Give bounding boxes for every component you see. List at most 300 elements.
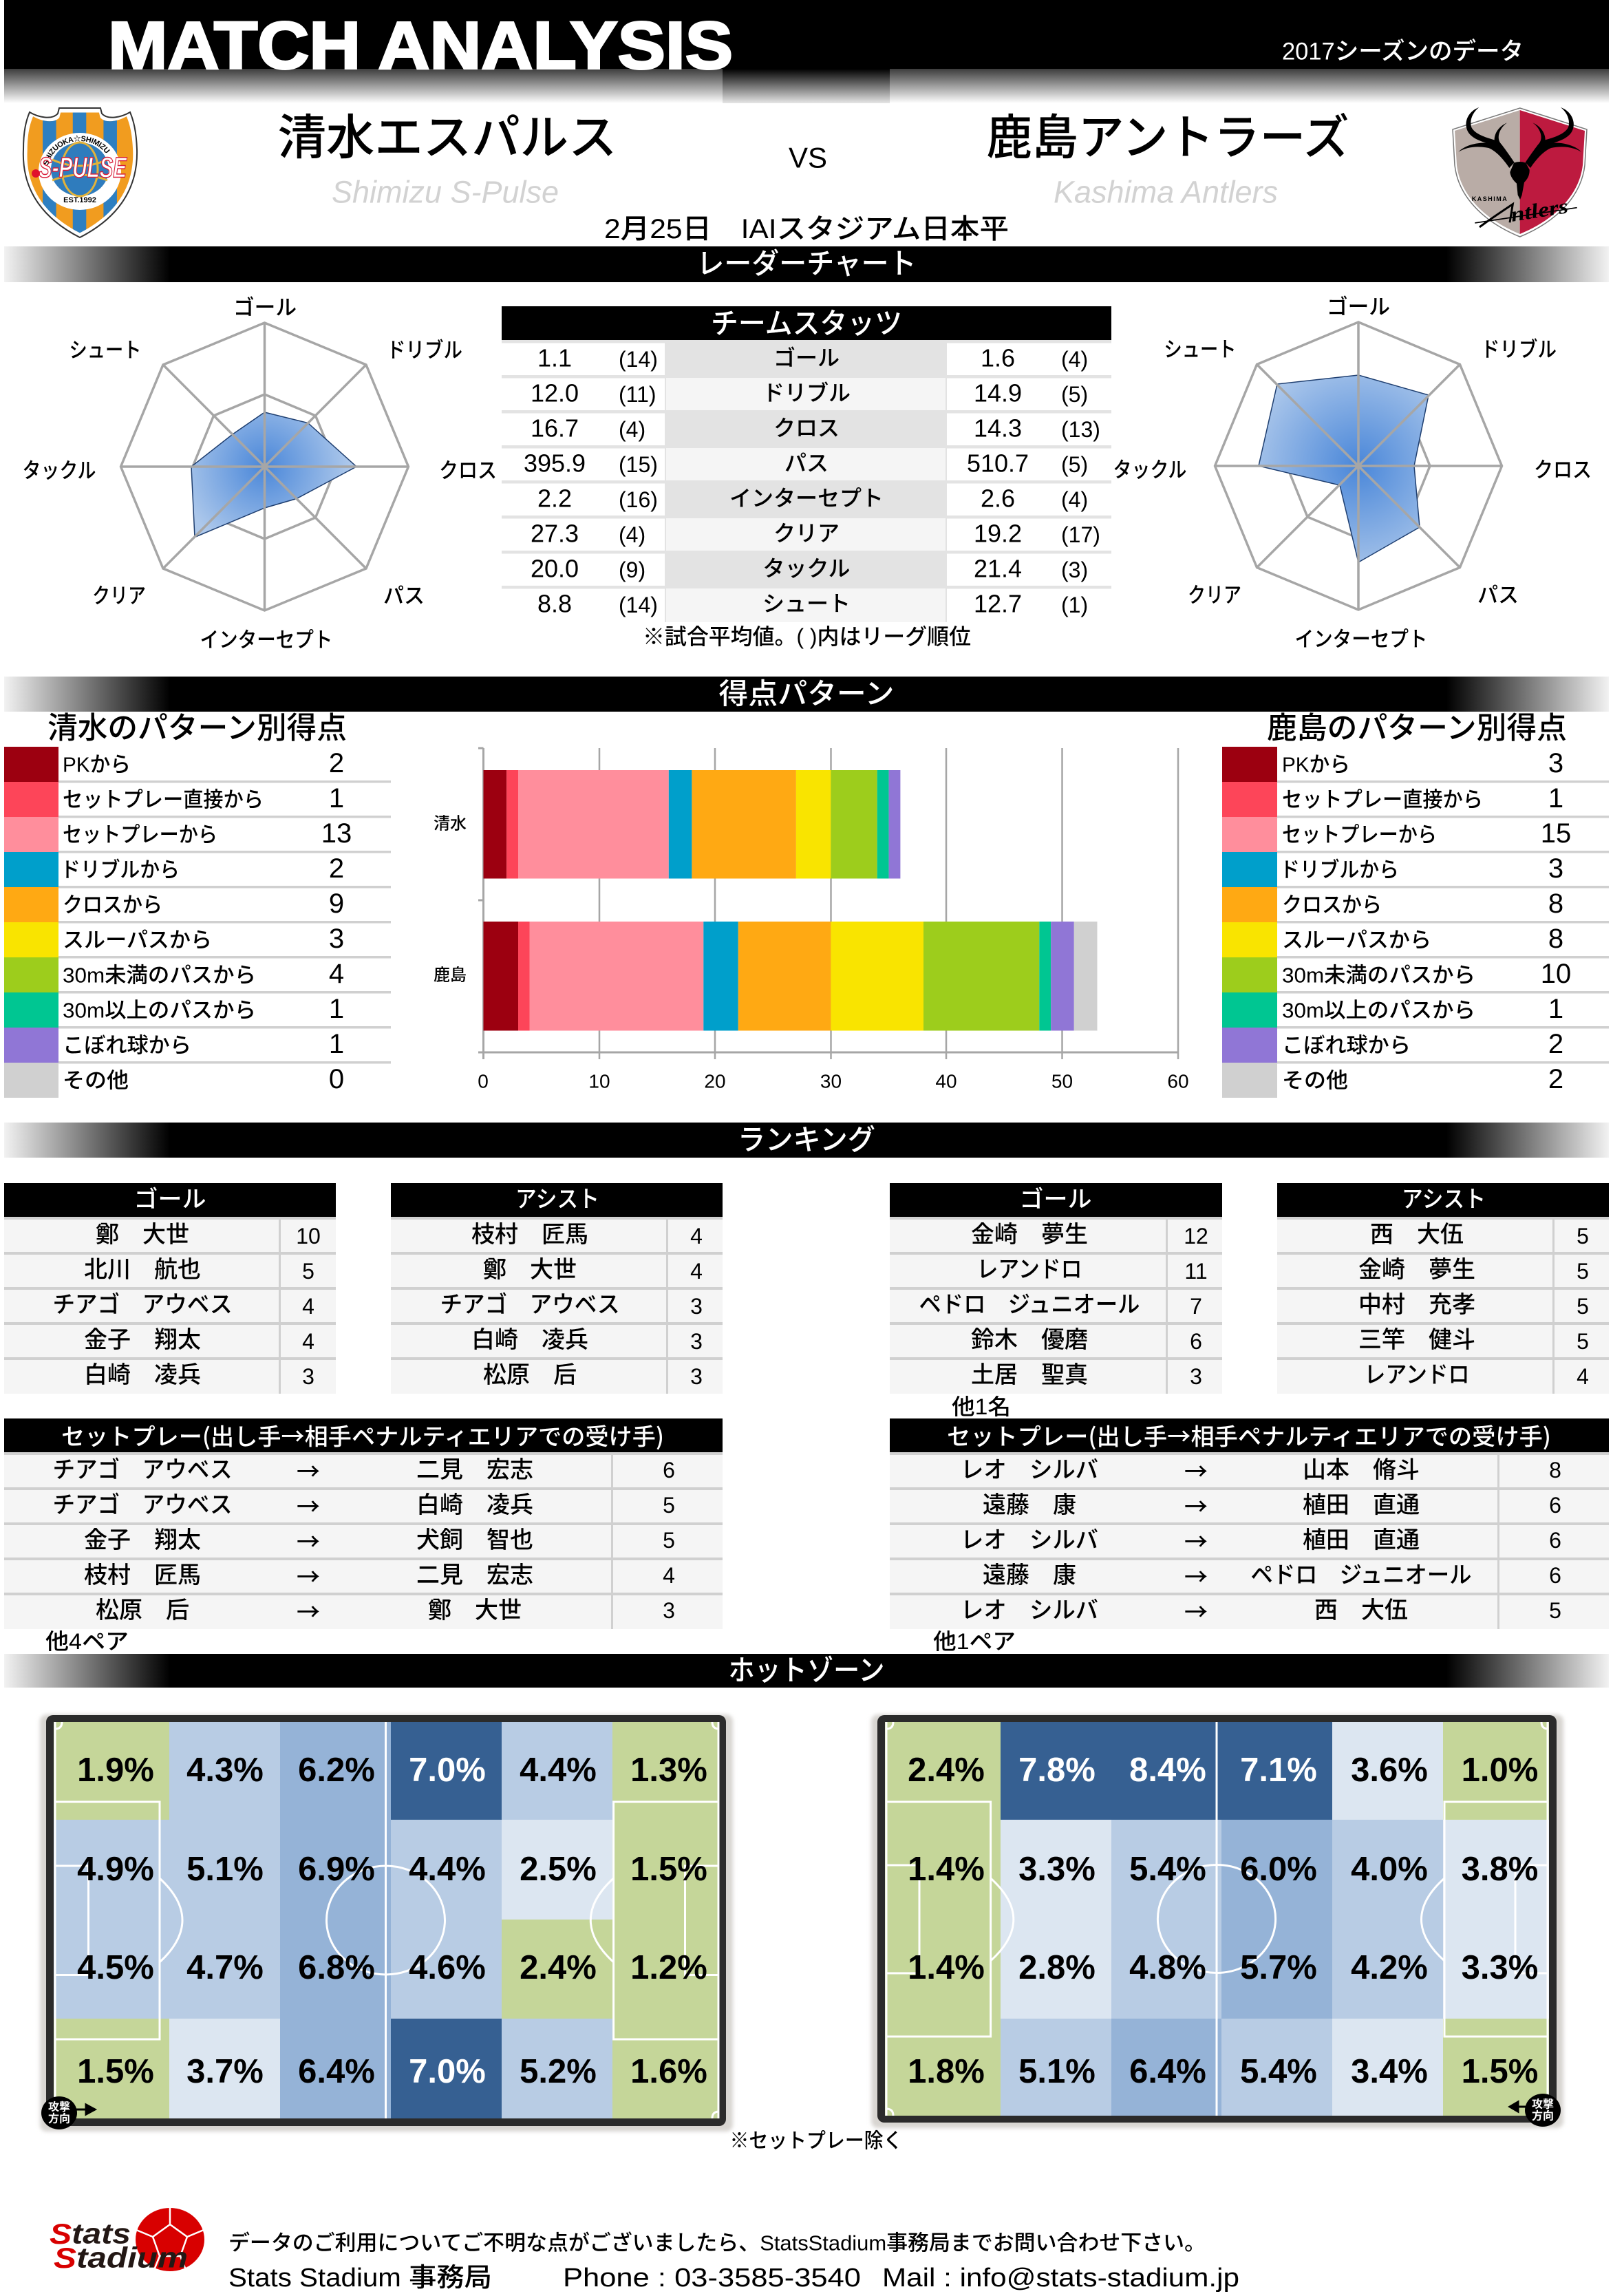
zone percentages: 1.2% bbox=[630, 1949, 707, 1986]
table: Shimizu goals: 10 bbox=[296, 1224, 321, 1248]
legend: Kashima patterns: 8 bbox=[1548, 924, 1563, 954]
table: Shimizu set plays: 枝村 匠馬 bbox=[84, 1562, 201, 1588]
table: Shimizu set plays: チアゴ アウベス bbox=[52, 1492, 233, 1518]
stats values: シュート bbox=[762, 591, 851, 616]
table: Shimizu assists: 3 bbox=[690, 1329, 703, 1354]
table: Shimizu set plays: → bbox=[297, 1594, 320, 1627]
table: Kashima goals: 12 bbox=[1184, 1224, 1208, 1248]
zone percentages: 4.8% bbox=[1129, 1949, 1206, 1986]
table: Kashima goals: ゴール bbox=[1020, 1187, 1091, 1213]
legend: Kashima patterns: セットプレー直接から bbox=[1282, 787, 1483, 812]
zone percentages: 2.5% bbox=[520, 1851, 597, 1888]
table: Shimizu assists: アシスト bbox=[515, 1187, 599, 1213]
zone percentages: 6.4% bbox=[1129, 2053, 1206, 2090]
table: Shimizu set plays: 犬飼 智也 bbox=[416, 1527, 533, 1553]
axis labels: 鹿島 bbox=[434, 966, 467, 984]
icon: attack direction: 方向 bbox=[48, 2112, 70, 2125]
zone percentages: 3.6% bbox=[1351, 1752, 1428, 1789]
radar labels: クロス bbox=[1534, 458, 1592, 482]
table: Kashima goals: ペドロ ジュニオール bbox=[919, 1292, 1140, 1318]
chart: Shimizu radar bbox=[22, 296, 497, 652]
table: Kashima goals: 土居 聖真 bbox=[971, 1362, 1088, 1388]
team name: Kashima: 鹿島アントラーズ bbox=[987, 111, 1349, 164]
legend: Shimizu patterns: クロスから bbox=[63, 893, 162, 917]
stats values: クロス bbox=[773, 416, 840, 440]
legend: Shimizu patterns: 30m以上のパスから bbox=[63, 998, 256, 1023]
zone percentages: 1.5% bbox=[1462, 2053, 1538, 2090]
legend: Shimizu patterns: 2 bbox=[329, 853, 344, 884]
table: Kashima assists: レアンドロ bbox=[1364, 1362, 1470, 1388]
table: Kashima set plays: → bbox=[1184, 1594, 1208, 1627]
footer: office name: Stats Stadium 事務局 bbox=[228, 2264, 492, 2293]
stats values: (11) bbox=[619, 382, 656, 407]
radar labels: ゴール bbox=[1327, 295, 1390, 319]
stats values: (15) bbox=[619, 452, 658, 477]
zone percentages: 5.4% bbox=[1129, 1851, 1206, 1888]
icon: Shimizu S-Pulse crest bbox=[22, 107, 138, 238]
stats values: (16) bbox=[619, 487, 658, 512]
radar labels bbox=[22, 296, 497, 652]
table: Shimizu set plays: 鄭 大世 bbox=[428, 1597, 522, 1624]
stats values: (3) bbox=[1061, 557, 1088, 582]
axis labels: 40 bbox=[935, 1071, 957, 1092]
table: Kashima goals: 金崎 夢生 bbox=[971, 1222, 1088, 1248]
legend: Shimizu patterns: セットプレーから bbox=[63, 823, 217, 847]
legend: Shimizu patterns: 13 bbox=[321, 818, 352, 849]
table: Shimizu set plays bbox=[4, 1418, 723, 1629]
table: Kashima set plays bbox=[890, 1418, 1609, 1629]
bar: Shimizu bbox=[483, 770, 900, 878]
icon: Kashima Antlers crest bbox=[1453, 107, 1587, 237]
radar labels: シュート bbox=[1164, 337, 1236, 362]
radar labels: ドリブル bbox=[1481, 337, 1557, 362]
section bar: radar chart: レーダーチャート bbox=[696, 248, 917, 279]
table: Shimizu goals: 金子 翔太 bbox=[84, 1327, 201, 1353]
section bar: radar chart bbox=[4, 246, 1609, 282]
table: Shimizu set plays: 二見 宏志 bbox=[416, 1457, 533, 1483]
zone percentages: 6.8% bbox=[298, 1949, 375, 1986]
icon: attack direction: 攻撃 bbox=[1532, 2098, 1554, 2110]
bar: Kashima bbox=[483, 922, 1097, 1031]
stats values: (4) bbox=[1061, 487, 1088, 512]
table: Shimizu assists bbox=[391, 1183, 723, 1394]
zone percentages: 4.6% bbox=[409, 1949, 486, 1986]
table: Kashima set plays: 6 bbox=[1549, 1528, 1561, 1553]
zone percentages: 5.1% bbox=[186, 1851, 264, 1888]
zone percentages: 3.4% bbox=[1351, 2053, 1428, 2090]
table: Kashima assists: 5 bbox=[1577, 1329, 1589, 1354]
table: Kashima goals: 3 bbox=[1190, 1364, 1202, 1389]
table: Kashima set plays: 西 大伍 bbox=[1314, 1597, 1408, 1624]
table: Shimizu goals: 4 bbox=[302, 1329, 314, 1354]
zone percentages: 6.9% bbox=[298, 1851, 375, 1888]
legend: Kashima patterns: 15 bbox=[1541, 818, 1571, 849]
table: Shimizu set plays: 5 bbox=[663, 1528, 675, 1553]
legend: Shimizu patterns: 2 bbox=[329, 748, 344, 778]
legend: Kashima patterns: 1 bbox=[1548, 994, 1563, 1024]
stats values: インターセプト bbox=[729, 486, 884, 511]
zone percentages: 4.4% bbox=[409, 1851, 486, 1888]
stats values: 27.3 bbox=[531, 519, 579, 548]
table: Kashima set plays: セットプレー(出し手→相手ペナルティエリアでの受け手) bbox=[947, 1418, 1551, 1452]
panel: Shimizu hot zone pitch bbox=[40, 1714, 733, 2132]
table: Shimizu set plays: → bbox=[297, 1488, 320, 1522]
table: team stats: チームスタッツ bbox=[711, 307, 902, 340]
legend: Kashima patterns: 30m未満のパスから bbox=[1282, 964, 1475, 987]
table: Kashima set plays: レオ シルバ bbox=[961, 1527, 1098, 1553]
radar labels: タックル bbox=[22, 458, 96, 483]
table: Shimizu goals: 5 bbox=[302, 1259, 314, 1284]
stats values: (5) bbox=[1061, 452, 1088, 477]
zone percentages: 3.3% bbox=[1018, 1851, 1096, 1888]
zone percentages: 4.2% bbox=[1351, 1949, 1428, 1986]
radar labels bbox=[1113, 295, 1592, 651]
legend: Kashima patterns: 1 bbox=[1548, 783, 1563, 814]
table: Kashima set plays: 植田 直通 bbox=[1303, 1527, 1420, 1553]
table: Kashima set plays: ペドロ ジュニオール bbox=[1251, 1562, 1471, 1588]
zone percentages: 7.0% bbox=[409, 2053, 486, 2090]
team name latin: Kashima: Kashima Antlers bbox=[1054, 175, 1278, 209]
stats values: 395.9 bbox=[524, 449, 586, 478]
table: Kashima assists: 5 bbox=[1577, 1224, 1589, 1248]
legend: Shimizu patterns: 3 bbox=[329, 924, 344, 954]
legend: Shimizu patterns: 0 bbox=[329, 1064, 344, 1094]
legend: Kashima patterns: 2 bbox=[1548, 1064, 1563, 1094]
table: Kashima set plays: → bbox=[1184, 1524, 1208, 1557]
zone percentages: 3.7% bbox=[186, 2053, 264, 2090]
radar labels: インターセプト bbox=[200, 628, 333, 652]
axis labels: 20 bbox=[704, 1071, 726, 1092]
stats values: (5) bbox=[1061, 382, 1088, 407]
table: Kashima assists: 三竿 健斗 bbox=[1358, 1327, 1475, 1353]
zone percentages: 1.5% bbox=[77, 2053, 154, 2090]
legend: Kashima patterns bbox=[1222, 747, 1609, 1098]
stats values: 12.7 bbox=[974, 589, 1022, 618]
zone percentages: 1.4% bbox=[908, 1949, 985, 1986]
table: Kashima set plays: 6 bbox=[1549, 1493, 1561, 1518]
zone percentages: 4.5% bbox=[77, 1949, 154, 1986]
stats values: 1.1 bbox=[537, 344, 572, 372]
icon: Shimizu S-Pulse crest: S-PULSE bbox=[39, 151, 127, 183]
legend: Kashima patterns: こぼれ球から bbox=[1282, 1034, 1411, 1057]
zone percentages: 5.7% bbox=[1240, 1949, 1317, 1986]
table: Kashima assists bbox=[1277, 1183, 1609, 1394]
match date and venue: 2月25日 IAIスタジアム日本平 bbox=[604, 214, 1009, 244]
zone percentages: 2.8% bbox=[1018, 1949, 1096, 1986]
versus label: VS bbox=[789, 142, 827, 173]
note: one other player: 他1名 bbox=[952, 1394, 1011, 1419]
table: Kashima set plays: 山本 脩斗 bbox=[1303, 1457, 1420, 1483]
season label: 2017シーズンのデータ bbox=[1282, 39, 1524, 65]
table: Shimizu set plays: 二見 宏志 bbox=[416, 1562, 533, 1588]
zone percentages: 7.1% bbox=[1240, 1752, 1317, 1789]
stats values: 2.2 bbox=[537, 485, 572, 512]
legend: Kashima patterns: 10 bbox=[1541, 959, 1571, 989]
zone percentages: 4.4% bbox=[520, 1752, 597, 1789]
legend: Kashima patterns: 2 bbox=[1548, 1029, 1563, 1059]
table: Shimizu assists: 4 bbox=[690, 1224, 703, 1248]
radar labels: クリア bbox=[92, 584, 146, 608]
zone percentages: 3.3% bbox=[1462, 1949, 1538, 1986]
stats values: (14) bbox=[619, 593, 658, 617]
legend: Shimizu patterns: スルーパスから bbox=[63, 928, 212, 953]
zone percentages: 4.0% bbox=[1351, 1851, 1428, 1888]
table: Shimizu set plays: 金子 翔太 bbox=[84, 1527, 201, 1553]
table: Kashima assists: 西 大伍 bbox=[1370, 1222, 1464, 1248]
footer: phone: Phone : 03-3585-3540 bbox=[563, 2264, 861, 2293]
legend: Kashima patterns: 8 bbox=[1548, 889, 1563, 919]
stats values: ゴール bbox=[773, 346, 840, 370]
section bar: ranking: ランキング bbox=[738, 1123, 875, 1156]
legend: Shimizu patterns: PKから bbox=[63, 753, 131, 776]
icon: Stats Stadium logo: Stats bbox=[50, 2218, 131, 2249]
table: Shimizu set plays: 3 bbox=[663, 1598, 675, 1623]
legend: Shimizu patterns bbox=[4, 747, 391, 1098]
radar labels: インターセプト bbox=[1295, 628, 1427, 651]
legend: Shimizu patterns: 4 bbox=[329, 959, 344, 989]
table: Kashima goals: 11 bbox=[1184, 1259, 1208, 1284]
radar labels: パス bbox=[383, 584, 425, 608]
table: Shimizu set plays: セットプレー(出し手→相手ペナルティエリアでの受け手) bbox=[61, 1418, 664, 1452]
table: Shimizu set plays: → bbox=[297, 1558, 320, 1593]
stats values: 14.9 bbox=[974, 379, 1022, 407]
radar labels: クロス bbox=[439, 458, 497, 483]
stats values: (14) bbox=[619, 347, 658, 372]
table: Kashima goals: 鈴木 優磨 bbox=[971, 1327, 1088, 1353]
stats values: 12.0 bbox=[531, 379, 579, 407]
table: Kashima assists: 5 bbox=[1577, 1259, 1589, 1284]
zone percentages: 1.8% bbox=[908, 2053, 985, 2090]
header band bbox=[4, 0, 1609, 103]
stats values: 2.6 bbox=[981, 485, 1015, 512]
table: Shimizu assists: 3 bbox=[690, 1294, 703, 1319]
stats values: (4) bbox=[1061, 347, 1088, 372]
radar labels: ドリブル bbox=[387, 339, 462, 362]
section bar: hot zones: ホットゾーン bbox=[728, 1655, 885, 1686]
icon: Stats Stadium logo: Stadium bbox=[54, 2241, 188, 2274]
title: MATCH ANALYSIS bbox=[108, 8, 733, 83]
stats values: (1) bbox=[1061, 593, 1088, 617]
legend: Shimizu patterns: 9 bbox=[329, 889, 344, 919]
zone percentages: 1.0% bbox=[1462, 1752, 1538, 1789]
zone percentages: 7.8% bbox=[1018, 1752, 1096, 1789]
note: one other pair: 他1ペア bbox=[933, 1629, 1016, 1654]
table: Kashima set plays: 植田 直通 bbox=[1303, 1492, 1420, 1518]
axis labels: 10 bbox=[588, 1071, 610, 1092]
table: Kashima set plays: → bbox=[1184, 1558, 1208, 1593]
axis labels: 50 bbox=[1051, 1071, 1073, 1092]
radar labels: シュート bbox=[69, 339, 142, 362]
stats values: (17) bbox=[1061, 522, 1100, 547]
table: Shimizu assists: 枝村 匠馬 bbox=[471, 1222, 588, 1248]
table: Kashima set plays: → bbox=[1184, 1488, 1208, 1522]
legend: Shimizu patterns: こぼれ球から bbox=[63, 1034, 191, 1057]
stats values: (9) bbox=[619, 557, 645, 582]
note: set plays excluded: ※セットプレー除く bbox=[729, 2129, 903, 2153]
legend: Shimizu patterns: セットプレー直接から bbox=[63, 787, 264, 812]
stats values: クリア bbox=[773, 521, 840, 546]
table: Shimizu set plays: 5 bbox=[663, 1493, 675, 1518]
note: four other pairs: 他4ペア bbox=[45, 1629, 129, 1654]
table: Kashima set plays: 6 bbox=[1549, 1563, 1561, 1588]
stats values: ドリブル bbox=[762, 381, 851, 405]
legend: Shimizu patterns: 30m未満のパスから bbox=[63, 964, 256, 987]
stats values bbox=[524, 344, 1100, 618]
table: Shimizu assists: 松原 后 bbox=[483, 1362, 577, 1388]
stats values: 1.6 bbox=[981, 344, 1015, 372]
legend: Shimizu patterns: ドリブルから bbox=[61, 858, 180, 882]
table: Shimizu goals bbox=[4, 1183, 336, 1394]
table: Shimizu goals: 鄭 大世 bbox=[96, 1222, 189, 1248]
legend: Kashima patterns: セットプレーから bbox=[1282, 823, 1437, 847]
zone percentages: 2.4% bbox=[520, 1949, 597, 1986]
table: Shimizu set plays: → bbox=[297, 1454, 320, 1487]
table: Shimizu assists: 4 bbox=[690, 1259, 703, 1284]
stats values: (4) bbox=[619, 522, 645, 547]
legend: Shimizu patterns: 1 bbox=[329, 1029, 344, 1059]
zone percentages bbox=[77, 1752, 707, 2090]
axis labels: 30 bbox=[820, 1071, 842, 1092]
zone percentages: 8.4% bbox=[1129, 1752, 1206, 1789]
zone percentages: 5.1% bbox=[1018, 2053, 1096, 2090]
zone percentages: 3.8% bbox=[1462, 1851, 1538, 1888]
legend: Kashima patterns: 30m以上のパスから bbox=[1282, 998, 1475, 1023]
zone percentages: 4.7% bbox=[186, 1949, 264, 1986]
table: Shimizu goals: 4 bbox=[302, 1294, 314, 1319]
table: Shimizu goals: チアゴ アウベス bbox=[52, 1292, 233, 1318]
stats values: タックル bbox=[762, 556, 851, 581]
table: Kashima goals: 7 bbox=[1190, 1294, 1202, 1319]
zone percentages: 2.4% bbox=[908, 1752, 985, 1789]
table: Shimizu goals: ゴール bbox=[133, 1187, 206, 1213]
legend: Kashima patterns: 3 bbox=[1548, 853, 1563, 884]
table: Kashima goals: レアンドロ bbox=[977, 1257, 1082, 1283]
section bar: hot zones bbox=[4, 1654, 1609, 1688]
zone percentages: 1.5% bbox=[630, 1851, 707, 1888]
table: Kashima assists: 金崎 夢生 bbox=[1358, 1257, 1475, 1283]
table: Shimizu assists: 白崎 凌兵 bbox=[471, 1327, 588, 1353]
table: Shimizu assists: チアゴ アウベス bbox=[440, 1292, 619, 1318]
zone percentages: 1.4% bbox=[908, 1851, 985, 1888]
table: Kashima set plays: → bbox=[1184, 1454, 1208, 1487]
table: Shimizu goals: 北川 航也 bbox=[84, 1257, 201, 1283]
zone percentages: 5.2% bbox=[520, 2053, 597, 2090]
stats footnote: ※試合平均値。( )内はリーグ順位 bbox=[643, 624, 971, 649]
zone percentages bbox=[908, 1752, 1538, 2090]
zone percentages: 6.4% bbox=[298, 2053, 375, 2090]
table: Kashima goals: 6 bbox=[1190, 1329, 1202, 1354]
table: Shimizu goals: 白崎 凌兵 bbox=[84, 1362, 201, 1388]
table: Shimizu set plays: チアゴ アウベス bbox=[52, 1457, 233, 1483]
table: Kashima set plays: 遠藤 康 bbox=[983, 1562, 1076, 1588]
table: Kashima assists: 4 bbox=[1577, 1364, 1589, 1389]
legend: Kashima patterns: その他 bbox=[1282, 1068, 1348, 1093]
axis labels: 0 bbox=[478, 1071, 489, 1092]
table: Kashima set plays: 遠藤 康 bbox=[983, 1492, 1076, 1518]
table: Shimizu set plays: 松原 后 bbox=[96, 1597, 189, 1624]
icon: Shimizu S-Pulse crest: SHIZUOKA☆SHIMIZU bbox=[44, 135, 110, 165]
chart: Kashima radar bbox=[1113, 295, 1592, 651]
legend: Kashima patterns: 3 bbox=[1548, 748, 1563, 778]
team name latin: Shimizu: Shimizu S-Pulse bbox=[332, 175, 559, 209]
axis labels: 清水 bbox=[434, 815, 467, 833]
section bar: ranking bbox=[4, 1123, 1609, 1158]
table: Shimizu set plays: 6 bbox=[663, 1458, 675, 1482]
icon: attack direction: 方向 bbox=[1532, 2109, 1554, 2123]
zone percentages: 6.2% bbox=[298, 1752, 375, 1789]
stats values: 8.8 bbox=[537, 589, 572, 618]
heading: Kashima patterns: 鹿島のパターン別得点 bbox=[1267, 712, 1567, 745]
legend: Kashima patterns: PKから bbox=[1282, 753, 1350, 776]
zone percentages: 1.3% bbox=[630, 1752, 707, 1789]
radar labels: クリア bbox=[1188, 584, 1241, 607]
legend: Kashima patterns: クロスから bbox=[1282, 893, 1382, 917]
chart: stacked bar of goals by pattern bbox=[434, 748, 1189, 1092]
stats values: 14.3 bbox=[974, 414, 1022, 442]
section bar: scoring patterns bbox=[4, 677, 1609, 712]
zone percentages: 6.0% bbox=[1240, 1851, 1317, 1888]
heading: Shimizu patterns: 清水のパターン別得点 bbox=[47, 712, 347, 745]
legend: Shimizu patterns: 1 bbox=[329, 994, 344, 1024]
stats values: 21.4 bbox=[974, 555, 1022, 582]
table: Shimizu set plays: 4 bbox=[663, 1563, 675, 1588]
footer: contact message: データのご利用についてご不明な点がございましたら、StatsStadium事務局までお問い合わせ下さい。 bbox=[228, 2231, 1206, 2255]
icon: attack direction bbox=[1510, 2094, 1561, 2127]
radar labels: タックル bbox=[1113, 458, 1186, 482]
table: Kashima goals bbox=[890, 1183, 1222, 1394]
table: Kashima assists: 5 bbox=[1577, 1294, 1589, 1319]
stats values: (4) bbox=[619, 417, 645, 442]
table: Shimizu set plays: 白崎 凌兵 bbox=[416, 1492, 533, 1518]
legend: Kashima patterns: スルーパスから bbox=[1282, 928, 1431, 953]
axis labels bbox=[434, 815, 1189, 1092]
table: team stats bbox=[502, 306, 1111, 622]
zone percentages: 1.6% bbox=[630, 2053, 707, 2090]
table: Shimizu goals: 3 bbox=[302, 1364, 314, 1389]
team name: Shimizu: 清水エスパルス bbox=[278, 111, 617, 164]
icon: attack direction bbox=[41, 2096, 95, 2129]
axis labels: 60 bbox=[1167, 1071, 1189, 1092]
table: Shimizu assists: 鄭 大世 bbox=[483, 1257, 577, 1283]
zone percentages: 1.9% bbox=[77, 1752, 154, 1789]
stats values: パス bbox=[784, 451, 829, 476]
footer: mail: Mail : info@stats-stadium.jp bbox=[882, 2264, 1239, 2293]
legend: Kashima patterns: ドリブルから bbox=[1280, 858, 1399, 882]
radar labels: パス bbox=[1477, 584, 1519, 607]
table: Kashima assists: 中村 充孝 bbox=[1358, 1292, 1475, 1318]
stats values: (13) bbox=[1061, 417, 1100, 442]
table: Kashima set plays: レオ シルバ bbox=[961, 1597, 1098, 1624]
panel: Kashima hot zone pitch bbox=[871, 1714, 1563, 2128]
stats values: 19.2 bbox=[974, 519, 1022, 548]
icon: attack direction: 攻撃 bbox=[48, 2101, 70, 2113]
zone percentages: 4.9% bbox=[77, 1851, 154, 1888]
table: Kashima set plays: 8 bbox=[1549, 1458, 1561, 1482]
zone percentages: 5.4% bbox=[1240, 2053, 1317, 2090]
icon: Shimizu S-Pulse crest: EST.1992 bbox=[63, 196, 96, 204]
zone percentages: 7.0% bbox=[409, 1752, 486, 1789]
legend: Shimizu patterns: 1 bbox=[329, 783, 344, 814]
icon: Kashima Antlers crest: KASHIMA bbox=[1472, 195, 1508, 202]
icon: Kashima Antlers crest: ntlers bbox=[1509, 195, 1570, 226]
table: Kashima assists: アシスト bbox=[1402, 1187, 1486, 1213]
table: Shimizu set plays: → bbox=[297, 1524, 320, 1557]
stats values: 20.0 bbox=[531, 555, 579, 582]
table: Shimizu assists: 3 bbox=[690, 1364, 703, 1389]
icon: Stats Stadium logo bbox=[50, 2208, 204, 2274]
legend: Shimizu patterns: その他 bbox=[63, 1068, 129, 1093]
table: Kashima set plays: レオ シルバ bbox=[961, 1457, 1098, 1483]
